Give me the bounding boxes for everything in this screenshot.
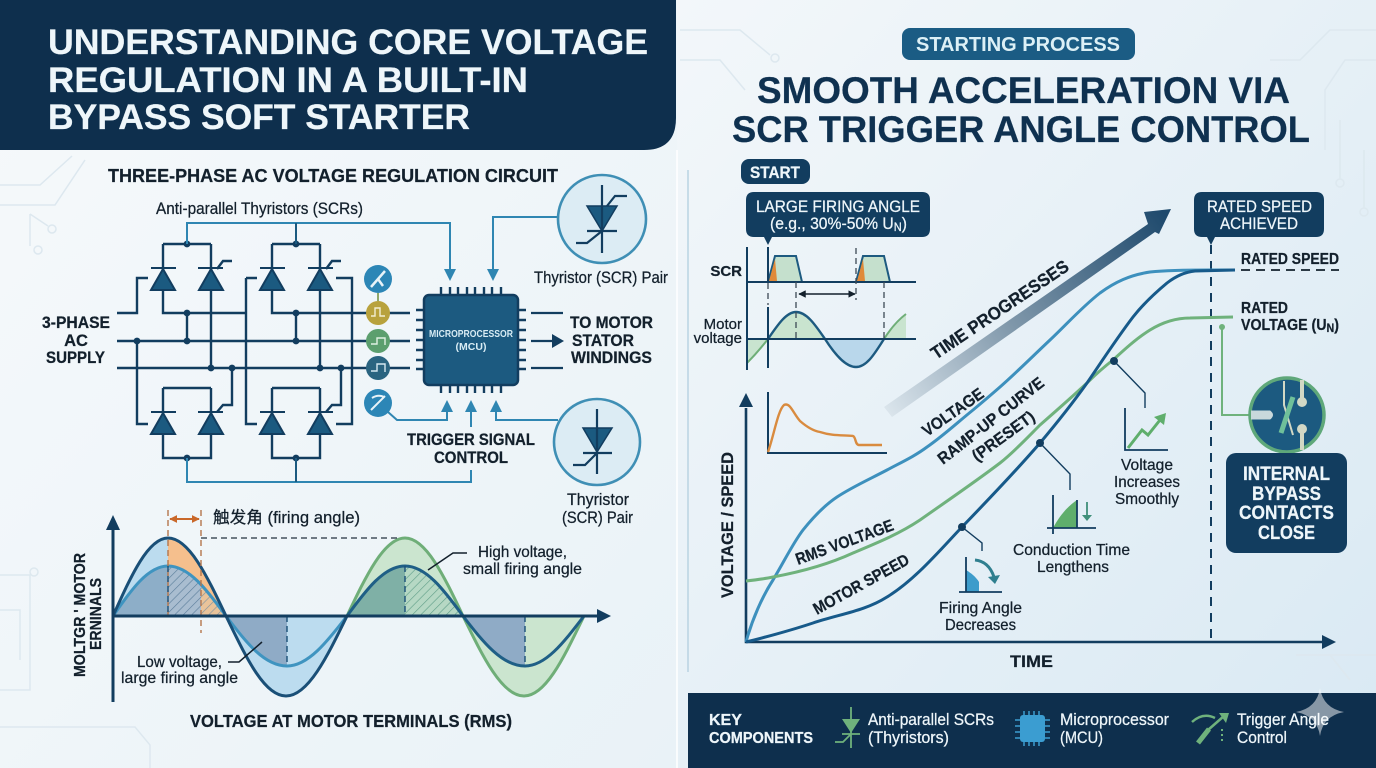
chart axes xyxy=(739,393,1336,649)
sparkle watermark xyxy=(1296,688,1344,736)
annotation: voltage increases smoothly xyxy=(1110,357,1180,508)
motor voltage wave xyxy=(747,312,906,367)
motor speed curve xyxy=(746,270,1235,642)
key heading xyxy=(709,712,813,747)
motor output xyxy=(531,313,653,368)
SCR timing diagram xyxy=(694,247,916,370)
bypass contacts box: INTERNAL xyxy=(1243,464,1330,485)
large firing angle callout: (e.g., 30%-50% U xyxy=(770,214,904,233)
title line 2: REGULATION IN A BUILT-IN xyxy=(48,61,528,100)
high voltage note: High voltage, xyxy=(478,544,567,561)
supply label: 3-PHASE xyxy=(42,314,110,332)
bypass contacts box: CONTACTS xyxy=(1239,503,1334,524)
right title line 1: SMOOTH ACCELERATION VIA xyxy=(757,70,1290,111)
rated voltage label: N xyxy=(1327,321,1334,335)
motor output: TO MOTOR xyxy=(570,314,653,332)
rated speed achieved callout: RATED SPEED xyxy=(1207,197,1312,216)
circuit wiring xyxy=(117,244,410,458)
title line 3: BYPASS SOFT STARTER xyxy=(48,98,470,137)
microprocessor chip: MICROPROCESSOR xyxy=(429,328,513,340)
legend: SCRs: Anti-parallel SCRs xyxy=(868,711,994,729)
start pill: START xyxy=(750,163,801,182)
thyristor pair callout bottom: (SCR) Pair xyxy=(562,509,633,527)
motor output: STATOR xyxy=(572,332,634,350)
feedback lines to MCU xyxy=(187,217,558,482)
thyristor pair callout bottom xyxy=(554,399,640,527)
legend: trigger xyxy=(1237,711,1329,747)
waveform y axis label: ERNINALS xyxy=(88,578,105,650)
period arrow xyxy=(799,293,855,295)
legend: SCRs xyxy=(868,711,994,747)
rated voltage label: RATED xyxy=(1241,300,1288,317)
bypass contact icon xyxy=(1219,324,1324,452)
low voltage note: Low voltage, xyxy=(137,654,222,671)
thyristor pair callout bottom: Thyristor xyxy=(567,491,629,509)
large firing angle callout: ) xyxy=(902,214,907,233)
rated voltage label: VOLTAGE (U xyxy=(1241,317,1337,334)
legend: trigger: Control xyxy=(1237,729,1287,747)
high voltage note xyxy=(428,544,582,578)
rated voltage label xyxy=(1241,300,1339,335)
title line 1: UNDERSTANDING CORE VOLTAGE xyxy=(48,23,648,62)
thyristor pair callout top xyxy=(534,175,668,287)
anti-parallel label: Anti-parallel Thyristors (SCRs) xyxy=(156,200,363,218)
firing angle marker: 触发角 (firing angle) xyxy=(213,508,360,527)
panel: waveform chart xyxy=(72,508,611,731)
annotation: firing angle decreases: Decreases xyxy=(945,617,1016,634)
arrow heads to MCU xyxy=(441,269,502,412)
orange inset chart xyxy=(768,392,887,453)
footer: key components xyxy=(688,693,1376,768)
bypass contacts box xyxy=(1226,453,1347,553)
high voltage note: small firing angle xyxy=(463,561,582,578)
axis titles: VOLTAGE / SPEED xyxy=(718,452,737,598)
bypass contacts box: CLOSE xyxy=(1258,523,1315,544)
start pill xyxy=(741,159,810,184)
time progresses arrow: TIME PROGRESSES xyxy=(927,256,1073,363)
timing labels: SCR xyxy=(710,263,742,280)
curve labels: (PRESET) xyxy=(969,408,1038,465)
annotation: voltage increases smoothly: Increases xyxy=(1114,474,1180,491)
annotation: conduction time lengthens: Lengthens xyxy=(1037,559,1109,576)
icon: MCU xyxy=(1015,711,1050,746)
signal icons xyxy=(364,265,392,417)
microprocessor chip xyxy=(416,287,526,393)
waveform curves xyxy=(113,538,584,696)
legend: SCRs: (Thyristors) xyxy=(868,729,949,747)
time progresses arrow xyxy=(884,209,1171,417)
rated speed achieved callout: ACHIEVED xyxy=(1220,214,1298,233)
legend: MCU: (MCU) xyxy=(1060,729,1103,747)
low voltage note: large firing angle xyxy=(121,670,238,687)
main ramp chart xyxy=(718,245,1336,671)
curve labels: MOTOR SPEED xyxy=(810,551,913,618)
timing labels xyxy=(694,263,742,347)
large firing angle callout xyxy=(746,192,930,245)
icon: trigger angle xyxy=(1192,713,1229,743)
supply label xyxy=(42,314,110,367)
bypass contacts box: BYPASS xyxy=(1252,484,1321,505)
rated speed achieved callout xyxy=(1194,192,1324,245)
trigger signal label: TRIGGER SIGNAL xyxy=(407,431,535,449)
waveform caption: VOLTAGE AT MOTOR TERMINALS (RMS) xyxy=(190,711,512,731)
annotation: voltage increases smoothly: Smoothly xyxy=(1115,491,1179,508)
annotation: firing angle decreases: Firing Angle xyxy=(939,600,1022,617)
circuit junction dots xyxy=(134,241,344,461)
thyristor pair callout top: Thyristor (SCR) Pair xyxy=(534,269,668,287)
timing labels: Motor xyxy=(704,316,742,333)
rated speed guide xyxy=(1210,245,1212,642)
large firing angle callout: LARGE FIRING ANGLE xyxy=(756,197,920,216)
waveform fills xyxy=(113,538,584,696)
rated speed label: RATED SPEED xyxy=(1241,251,1339,268)
axis titles xyxy=(718,452,1053,671)
axis titles: TIME xyxy=(1010,652,1053,671)
trigger signal label: CONTROL xyxy=(434,449,508,467)
starting process pill: STARTING PROCESS xyxy=(916,34,1120,56)
motor output: WINDINGS xyxy=(571,349,652,367)
starting process pill xyxy=(902,28,1135,60)
microprocessor chip: (MCU) xyxy=(456,341,486,353)
timing axes xyxy=(747,247,916,370)
curve labels: VOLTAGE xyxy=(919,385,987,440)
annotation: conduction time lengthens xyxy=(1013,439,1130,576)
legend: MCU xyxy=(1060,711,1169,747)
icon: SCR xyxy=(835,707,860,748)
header panel: main title xyxy=(0,0,676,150)
key heading: KEY xyxy=(709,712,742,729)
thyristor symbols xyxy=(151,268,333,434)
SCR pulses xyxy=(768,256,890,282)
curve labels: RAMP-UP CURVE xyxy=(934,374,1048,468)
low voltage note xyxy=(121,642,262,687)
waveform y axis label: MOLTGR ' MOTOR xyxy=(72,553,89,677)
axes xyxy=(106,515,611,702)
panel: circuit xyxy=(42,166,668,527)
voltage curve xyxy=(746,270,1235,642)
annotation: firing angle decreases xyxy=(939,523,1022,634)
rated voltage label: ) xyxy=(1334,317,1339,334)
key heading: COMPONENTS xyxy=(709,730,813,747)
annotation: voltage increases smoothly: Voltage xyxy=(1121,457,1173,474)
right title line 2: SCR TRIGGER ANGLE CONTROL xyxy=(732,109,1310,150)
annotation: conduction time lengthens: Conduction Time xyxy=(1013,542,1130,559)
waveform y axis label xyxy=(72,553,105,677)
supply label: AC xyxy=(64,332,88,350)
large firing angle callout: N xyxy=(894,220,902,234)
timing dashes xyxy=(768,248,884,339)
circuit heading: THREE-PHASE AC VOLTAGE REGULATION CIRCUIT xyxy=(108,166,558,186)
supply label: SUPPLY xyxy=(46,349,105,367)
legend: trigger: Trigger Angle xyxy=(1237,711,1329,729)
trigger signal label xyxy=(407,431,535,467)
timing labels: voltage xyxy=(694,330,742,347)
legend: MCU: Microprocessor xyxy=(1060,711,1169,729)
curve labels xyxy=(793,374,1048,618)
curve labels: RMS VOLTAGE xyxy=(793,517,896,569)
dashed markers xyxy=(168,510,525,666)
right heading xyxy=(732,28,1310,150)
RMS voltage curve xyxy=(746,317,1233,581)
